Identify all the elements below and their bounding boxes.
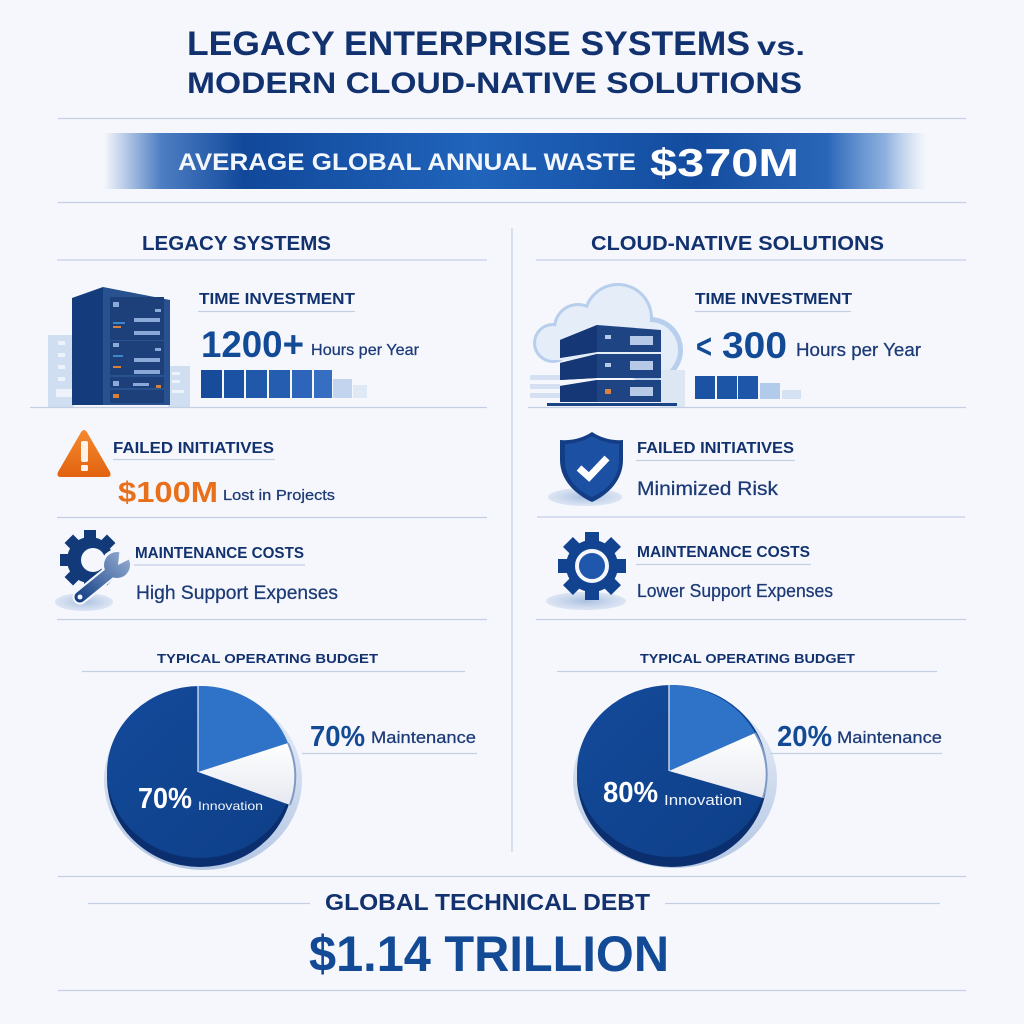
stat: maintenance costs: MAINTENANCE COSTS (637, 544, 810, 561)
title: MODERN CLOUD-NATIVE SOLUTIONS (187, 67, 802, 100)
banner: average global annual waste: AVERAGE GLOBAL ANNUAL WASTE (178, 149, 636, 176)
stat: failed initiatives: Minimized Risk (637, 479, 779, 500)
stat: maintenance costs: Lower Support Expenses (637, 581, 833, 601)
chart: legacy budget pie (104, 686, 302, 870)
title (187, 25, 805, 100)
heading: cloud-native solutions: CLOUD-NATIVE SOLUTIONS (591, 233, 884, 255)
icon: gear (546, 532, 626, 610)
stat: maintenance costs (636, 544, 833, 601)
chart: legacy budget pie: Innovation (198, 799, 263, 813)
stat: failed initiatives: FAILED INITIATIVES (637, 440, 794, 457)
icon: cloud server stack (530, 283, 685, 407)
heading: legacy systems: LEGACY SYSTEMS (142, 233, 331, 255)
footer: global technical debt (88, 889, 940, 982)
stat: failed initiatives (636, 440, 795, 500)
stat: time investment: 1200+ (201, 324, 304, 365)
footer: global technical debt: $1.14 TRILLION (309, 926, 669, 982)
stat: time investment: TIME INVESTMENT (199, 291, 355, 308)
legend: cloud maintenance share: Maintenance (837, 728, 942, 747)
stat: time investment: Hours per Year (796, 340, 921, 360)
footer: global technical debt: GLOBAL TECHNICAL DEBT (325, 889, 650, 915)
chart: cloud budget pie: Innovation (664, 792, 742, 809)
banner: average global annual waste (104, 133, 926, 189)
stat: time investment: Hours per Year (311, 342, 420, 359)
stat: maintenance costs: MAINTENANCE COSTS (135, 545, 304, 562)
stat: failed initiatives (113, 440, 335, 509)
icon: shield with check (548, 432, 623, 506)
legend: cloud maintenance share (770, 721, 942, 754)
chart: cloud budget pie (573, 685, 777, 868)
stat: time investment: < (696, 328, 712, 366)
icon: server rack with city (48, 287, 190, 407)
title: LEGACY ENTERPRISE SYSTEMS (187, 25, 750, 63)
panel: legacy systems (30, 233, 487, 870)
legend: cloud maintenance share: 20% (777, 721, 832, 753)
stat: failed initiatives: Lost in Projects (223, 487, 335, 504)
heading: typical operating budget: TYPICAL OPERATING BUDGET (157, 651, 378, 666)
heading: typical operating budget: TYPICAL OPERATING BUDGET (640, 651, 855, 666)
stat: time investment: 300 (722, 325, 787, 366)
icon: gear and wrench (55, 530, 136, 611)
stat: maintenance costs: High Support Expenses (136, 583, 338, 604)
bar: cloud hours (695, 376, 801, 399)
legend: legacy maintenance share: Maintenance (371, 728, 476, 747)
stat: failed initiatives: $100M (118, 477, 218, 509)
stat: time investment (695, 291, 921, 399)
stat: failed initiatives: FAILED INITIATIVES (113, 440, 274, 457)
chart: cloud budget pie: 80% (603, 777, 658, 809)
banner: average global annual waste: $370M (650, 142, 799, 185)
legend: legacy maintenance share: 70% (310, 721, 365, 753)
chart: legacy budget pie: 70% (138, 783, 192, 815)
stat: maintenance costs (134, 545, 338, 604)
icon: warning triangle (57, 430, 111, 477)
stat: time investment (198, 291, 420, 398)
stat: time investment: TIME INVESTMENT (695, 291, 852, 308)
title: vs. (757, 31, 805, 61)
legend: legacy maintenance share (302, 721, 477, 754)
panel: cloud-native solutions (528, 233, 966, 868)
bar: legacy hours (201, 370, 367, 398)
